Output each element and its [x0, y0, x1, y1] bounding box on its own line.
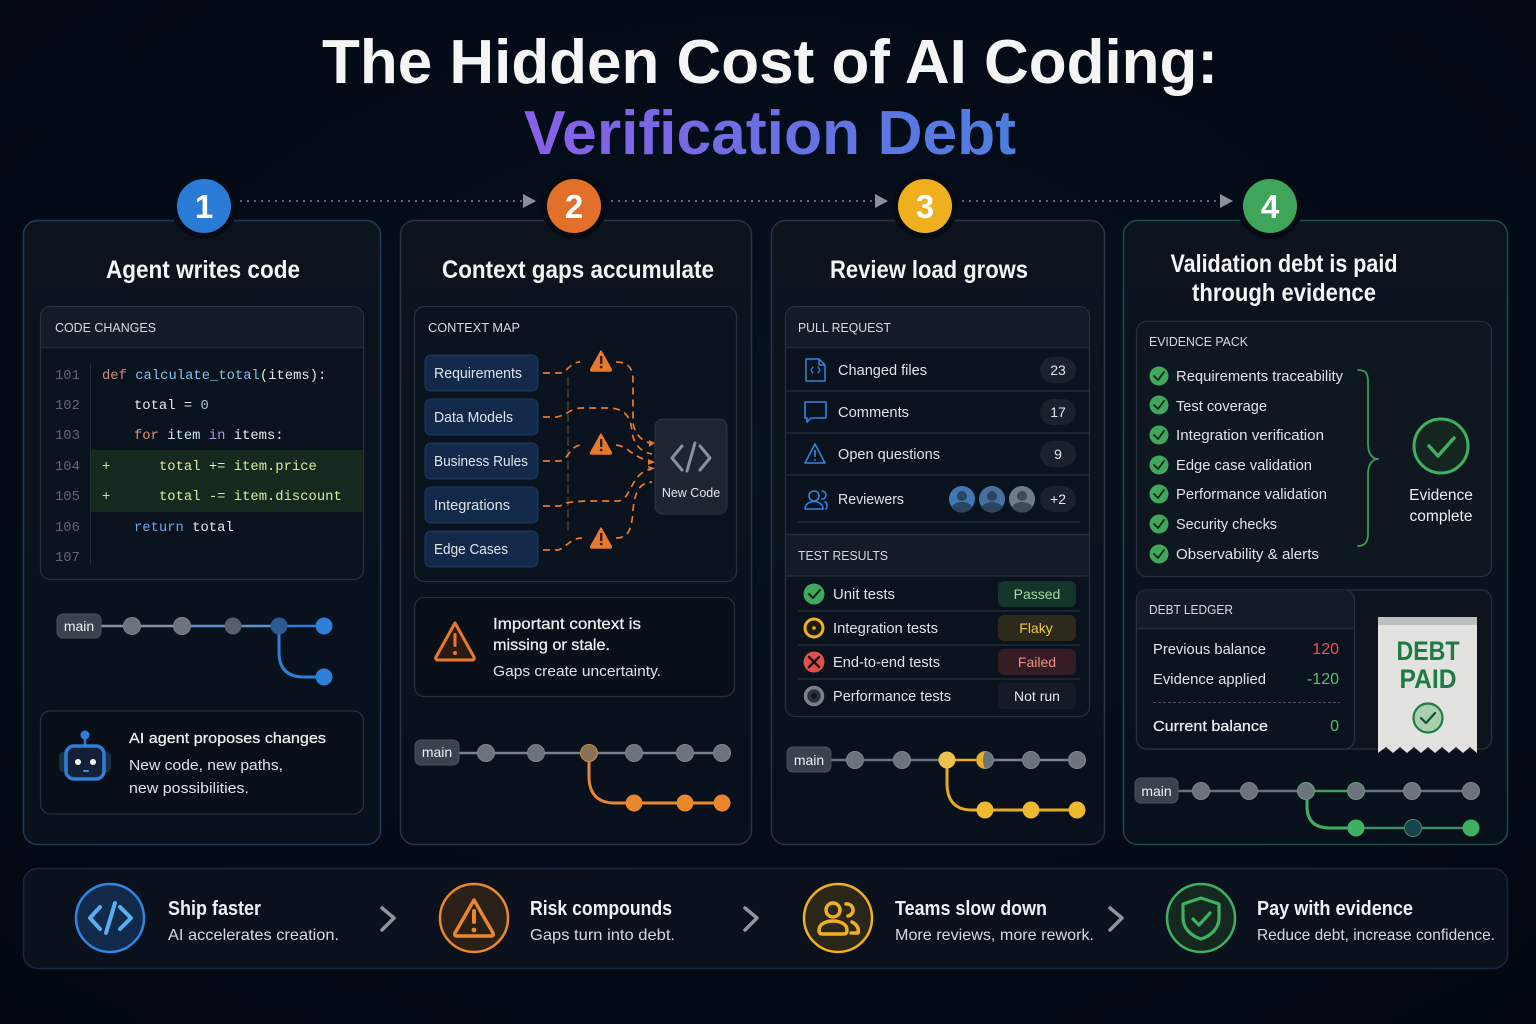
- row: comments: [805, 399, 1076, 425]
- agent note: [40, 711, 364, 814]
- new code node: New Code: [662, 486, 720, 500]
- step badge 4: [1237, 173, 1303, 239]
- git graph: [1135, 778, 1480, 836]
- debt ledger: DEBT LEDGER: [1149, 602, 1233, 617]
- debt ledger: [1136, 590, 1492, 749]
- item: pay with evidence: Pay with evidence: [1257, 898, 1413, 920]
- check: requirements traceability: Requirements traceability: [1176, 369, 1344, 385]
- heading: through evidence: [1192, 279, 1376, 307]
- brace: [1358, 370, 1378, 546]
- item: risk compounds: [440, 884, 675, 952]
- agent note: AI agent proposes changes: [129, 730, 326, 747]
- icon: warning top: [591, 351, 611, 371]
- test results section: [786, 534, 1089, 709]
- evidence complete label: complete: [1410, 508, 1472, 525]
- warning callout: Important context is: [493, 616, 641, 633]
- row: open questions: [805, 441, 1076, 467]
- debt ledger: Evidence applied: [1153, 672, 1266, 688]
- check: integration verification: Integration verification: [1176, 428, 1324, 444]
- arrow: step 2 to 3: [611, 194, 888, 208]
- evidence pack box: EVIDENCE PACK: [1149, 334, 1248, 349]
- connector lines: [543, 362, 655, 550]
- git graph: main: [1141, 783, 1172, 799]
- item: ship faster: [76, 884, 339, 952]
- icon: evidence complete check: [1414, 419, 1468, 473]
- code changes box: total = 0: [134, 398, 209, 414]
- row: performance tests: Performance tests: [833, 689, 951, 705]
- agent note: New code, new paths,: [129, 758, 283, 774]
- chevron: [382, 908, 394, 930]
- row: reviewers: Reviewers: [838, 492, 904, 508]
- row: comments: Comments: [838, 405, 909, 421]
- pull request box: PULL REQUEST: [798, 320, 891, 335]
- bottom summary bar: [24, 868, 1508, 968]
- step badge 3: [892, 173, 958, 239]
- row: integration tests: Flaky: [1019, 620, 1053, 636]
- check: observability and alerts: Observability & alerts: [1176, 547, 1319, 563]
- row: comments: 17: [1050, 404, 1066, 420]
- context map box: CONTEXT MAP: [428, 320, 520, 335]
- row: integration tests: [805, 615, 1076, 641]
- context map box: [414, 306, 736, 582]
- row: unit tests: Passed: [1014, 586, 1060, 602]
- icon: warning bottom: [591, 528, 611, 548]
- row: open questions: Open questions: [838, 447, 940, 463]
- chip: Data Models: [425, 399, 538, 435]
- item: ship faster: Ship faster: [168, 898, 261, 920]
- git graph: main: [422, 744, 452, 760]
- agent note: new possibilities.: [129, 781, 249, 797]
- check: integration verification: [1150, 426, 1324, 444]
- item: risk compounds: Gaps turn into debt.: [530, 927, 675, 944]
- git graph: main: [64, 618, 94, 634]
- code changes box: 106: [55, 520, 80, 536]
- debt paid receipt: PAID: [1400, 664, 1456, 694]
- icon: warning: [436, 623, 474, 660]
- warning callout: [414, 598, 734, 696]
- step badge 4: 4: [1261, 188, 1280, 225]
- debt ledger: 120: [1312, 641, 1339, 658]
- check: observability and alerts: [1150, 544, 1319, 564]
- code changes box: CODE CHANGES: [55, 320, 156, 335]
- row: unit tests: [804, 581, 1076, 607]
- chevron: [1110, 908, 1122, 930]
- item: ship faster: AI accelerates creation.: [168, 927, 339, 944]
- chip: Data Models: Data Models: [434, 410, 513, 426]
- check: security checks: [1150, 514, 1277, 534]
- panel: step 1: [24, 173, 380, 844]
- chip: Requirements: [425, 355, 538, 391]
- row: open questions: 9: [1054, 446, 1062, 462]
- item: pay with evidence: [1167, 884, 1495, 952]
- code changes box: +: [102, 459, 110, 475]
- evidence complete label: Evidence: [1409, 487, 1473, 504]
- item: teams slow down: More reviews, more rework.: [895, 927, 1094, 944]
- row: unit tests: Unit tests: [833, 587, 895, 603]
- warning callout: missing or stale.: [493, 637, 610, 654]
- code changes box: [40, 306, 364, 580]
- item: teams slow down: [804, 884, 1094, 952]
- row: changed files: Changed files: [838, 363, 927, 379]
- row: changed files: 23: [1050, 362, 1066, 378]
- debt ledger: 0: [1330, 718, 1339, 735]
- heading: Validation debt is paid: [1170, 250, 1398, 278]
- code changes box: 101: [55, 368, 80, 384]
- step badge 2: [541, 173, 607, 239]
- debt ledger: -120: [1307, 671, 1339, 688]
- evidence pack box: [1136, 322, 1492, 576]
- row: changed files: [806, 357, 1076, 383]
- debt ledger: Current balance: [1153, 718, 1268, 735]
- item: risk compounds: Risk compounds: [530, 898, 672, 920]
- row: integration tests: Integration tests: [833, 621, 938, 637]
- row: end-to-end tests: End-to-end tests: [833, 655, 940, 671]
- code changes box: total -= item.discount: [159, 489, 342, 505]
- arrow: step 1 to 2: [240, 194, 536, 208]
- check: edge case validation: Edge case validation: [1176, 458, 1312, 474]
- icon: shield circle: [1167, 884, 1235, 952]
- heading: Agent writes code: [106, 256, 300, 284]
- row: performance tests: Not run: [1014, 688, 1060, 704]
- code changes box: +: [102, 489, 110, 505]
- icon: people circle: [804, 884, 872, 952]
- code changes box: def calculate_total(items):: [102, 368, 326, 384]
- git graph: [57, 614, 332, 686]
- code changes box: 102: [55, 398, 80, 414]
- code changes box: 107: [55, 550, 80, 566]
- step badge 2: 2: [565, 188, 583, 225]
- chip: Edge Cases: [425, 531, 538, 567]
- row: reviewers: [805, 486, 1076, 513]
- row: end-to-end tests: [804, 649, 1076, 675]
- chip: Edge Cases: Edge Cases: [434, 542, 508, 558]
- row: reviewers: +2: [1050, 491, 1066, 507]
- code changes box: 105: [55, 489, 80, 505]
- heading: Review load grows: [830, 256, 1028, 284]
- panel: step 2: [400, 173, 752, 844]
- icon: robot: [59, 730, 111, 779]
- check: test coverage: Test coverage: [1176, 399, 1267, 415]
- code changes box: 104: [55, 459, 80, 475]
- chip: Requirements: Requirements: [434, 366, 522, 382]
- new code node: [655, 419, 727, 514]
- code changes box: total += item.price: [159, 459, 317, 475]
- panel: step 4: [1124, 173, 1508, 844]
- heading: Context gaps accumulate: [442, 256, 714, 284]
- git graph: [415, 740, 730, 812]
- check: test coverage: [1150, 396, 1267, 415]
- icon: warning middle: [591, 434, 611, 454]
- title: The Hidden Cost of AI Coding:: [322, 28, 1218, 97]
- avatars: [949, 486, 1035, 513]
- debt ledger: Previous balance: [1153, 642, 1266, 658]
- title: Verification Debt: [524, 99, 1016, 168]
- git graph: main: [794, 752, 824, 768]
- test results section: TEST RESULTS: [798, 548, 888, 563]
- title: [322, 28, 1218, 168]
- pull request box: [786, 306, 1090, 716]
- warning callout: Gaps create uncertainty.: [493, 664, 661, 680]
- check: edge case validation: [1150, 456, 1312, 474]
- icon: warning circle: [440, 884, 508, 952]
- step badge 1: [171, 173, 237, 239]
- heading: [1170, 250, 1398, 307]
- chip: Integrations: [425, 487, 538, 523]
- step badge 3: 3: [916, 188, 934, 225]
- item: teams slow down: Teams slow down: [895, 898, 1047, 920]
- check: performance validation: Performance validation: [1176, 487, 1327, 503]
- chip: Integrations: Integrations: [434, 498, 510, 514]
- debt paid receipt: DEBT: [1396, 636, 1460, 666]
- git graph: [787, 747, 1086, 818]
- debt paid receipt: [1378, 617, 1477, 753]
- evidence complete label: [1409, 487, 1473, 525]
- chip: Business Rules: Business Rules: [434, 454, 528, 470]
- code changes box: for item in items:: [134, 428, 284, 444]
- icon: code circle: [76, 884, 144, 952]
- step badge 1: 1: [195, 188, 213, 225]
- code changes box: return total: [134, 520, 234, 536]
- row: end-to-end tests: Failed: [1018, 654, 1056, 670]
- check: security checks: Security checks: [1176, 517, 1277, 533]
- panel: step 3: [772, 173, 1104, 844]
- item: pay with evidence: Reduce debt, increase confidence.: [1257, 927, 1495, 944]
- arrow: step 3 to 4: [962, 194, 1233, 208]
- chevron: [745, 908, 757, 930]
- row: performance tests: [806, 683, 1076, 709]
- code changes box: 103: [55, 428, 80, 444]
- chip: Business Rules: [425, 443, 538, 479]
